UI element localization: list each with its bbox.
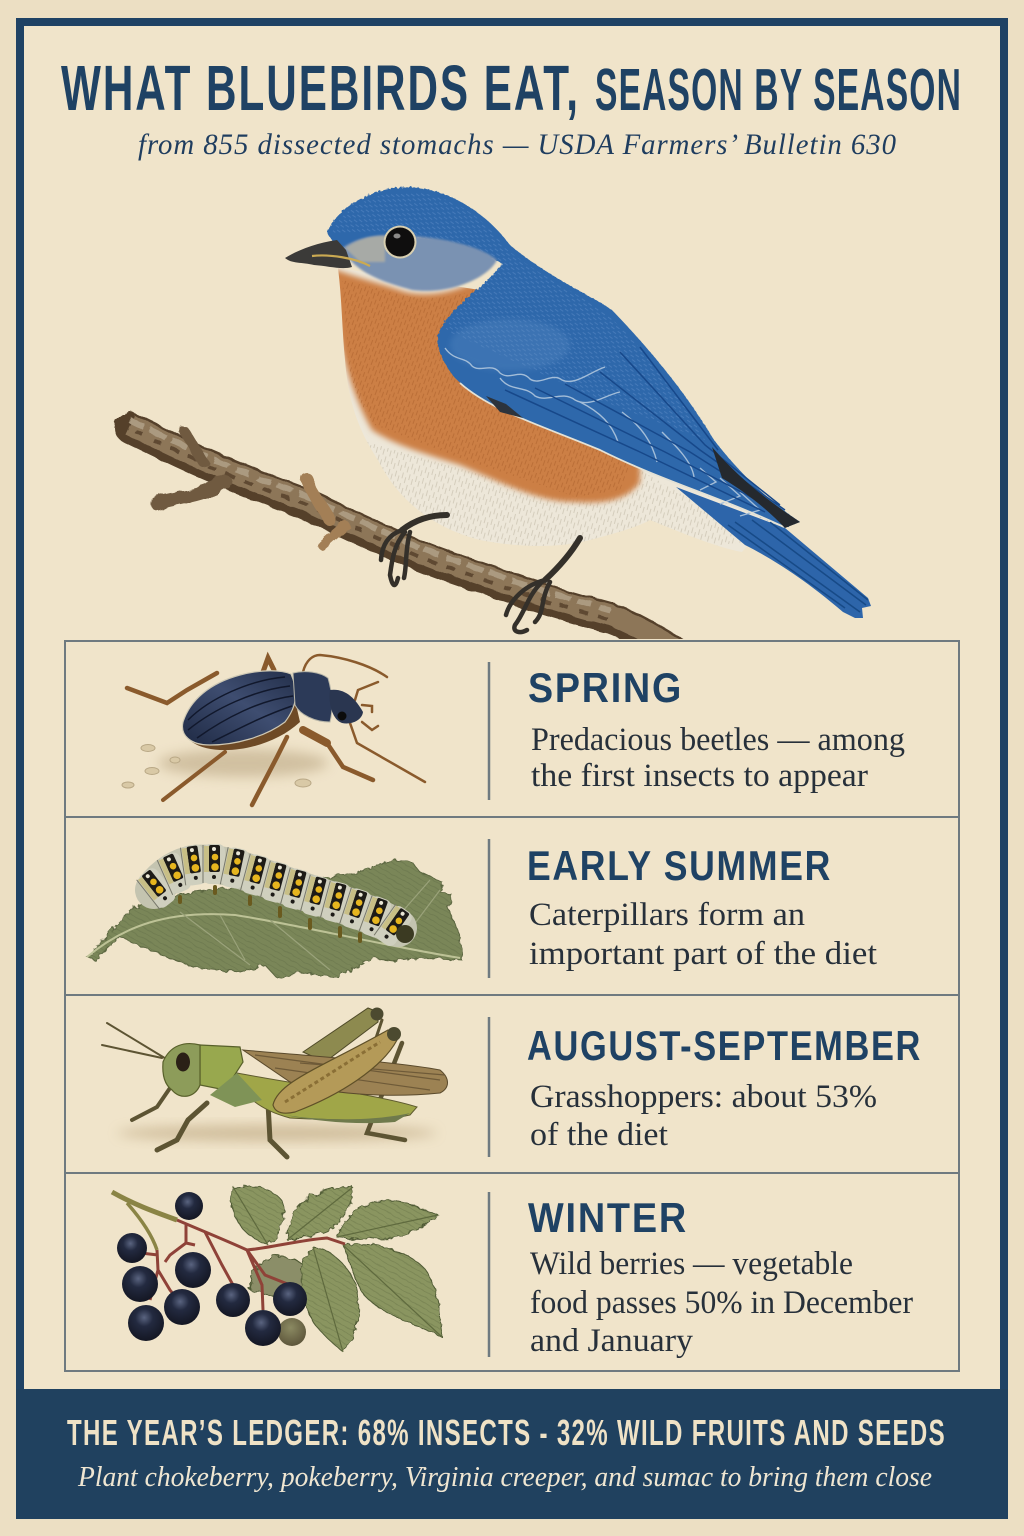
beak (285, 240, 352, 268)
body text: important part of the diet (529, 936, 877, 972)
body text: Predacious beetles — among (531, 722, 905, 758)
panel: spring (122, 655, 905, 805)
icon: grasshopper (102, 1008, 448, 1157)
body text (531, 722, 905, 794)
title: WHAT BLUEBIRDS EAT, (61, 52, 580, 124)
body text: the first insects to appear (531, 758, 868, 794)
illustration: bluebird on branch (130, 187, 871, 655)
legs and feet (381, 515, 580, 632)
panel: winter (112, 1186, 913, 1359)
icon: berry sprig (112, 1186, 442, 1352)
body text: food passes 50% in December (530, 1285, 913, 1321)
body text: Caterpillars form an (529, 897, 805, 933)
icon: caterpillar on leaf (87, 844, 462, 978)
tail (676, 487, 871, 618)
heading: SPRING (528, 664, 683, 711)
body text: Wild berries — vegetable (530, 1246, 853, 1282)
panel: august-september (102, 1008, 922, 1157)
body text: and January (530, 1323, 694, 1359)
panel: early summer (87, 842, 877, 978)
eye (384, 226, 416, 258)
body text (530, 1079, 877, 1153)
underparts (338, 268, 769, 552)
primaries dark tips (712, 447, 800, 528)
footer banner (16, 1389, 1008, 1519)
heading: WINTER (528, 1194, 688, 1241)
heading: AUGUST-SEPTEMBER (527, 1022, 922, 1069)
body text (530, 1246, 913, 1359)
wing feathers (445, 319, 785, 527)
icon: beetle (122, 655, 425, 805)
body text: of the diet (530, 1117, 668, 1153)
seasons table (65, 641, 959, 1371)
branch (130, 420, 680, 655)
orange breast (330, 260, 640, 503)
body text (529, 897, 877, 972)
cheek patch (340, 235, 497, 291)
back, wing and head silhouette (327, 187, 800, 528)
planting tip: Plant chokeberry, pokeberry, Virginia creeper, and sumac to bring them close (77, 1462, 932, 1493)
subtitle: from 855 dissected stomachs — USDA Farmers’ Bulletin 630 (138, 128, 897, 161)
heading: EARLY SUMMER (527, 842, 832, 889)
body text: Grasshoppers: about 53% (530, 1079, 877, 1115)
